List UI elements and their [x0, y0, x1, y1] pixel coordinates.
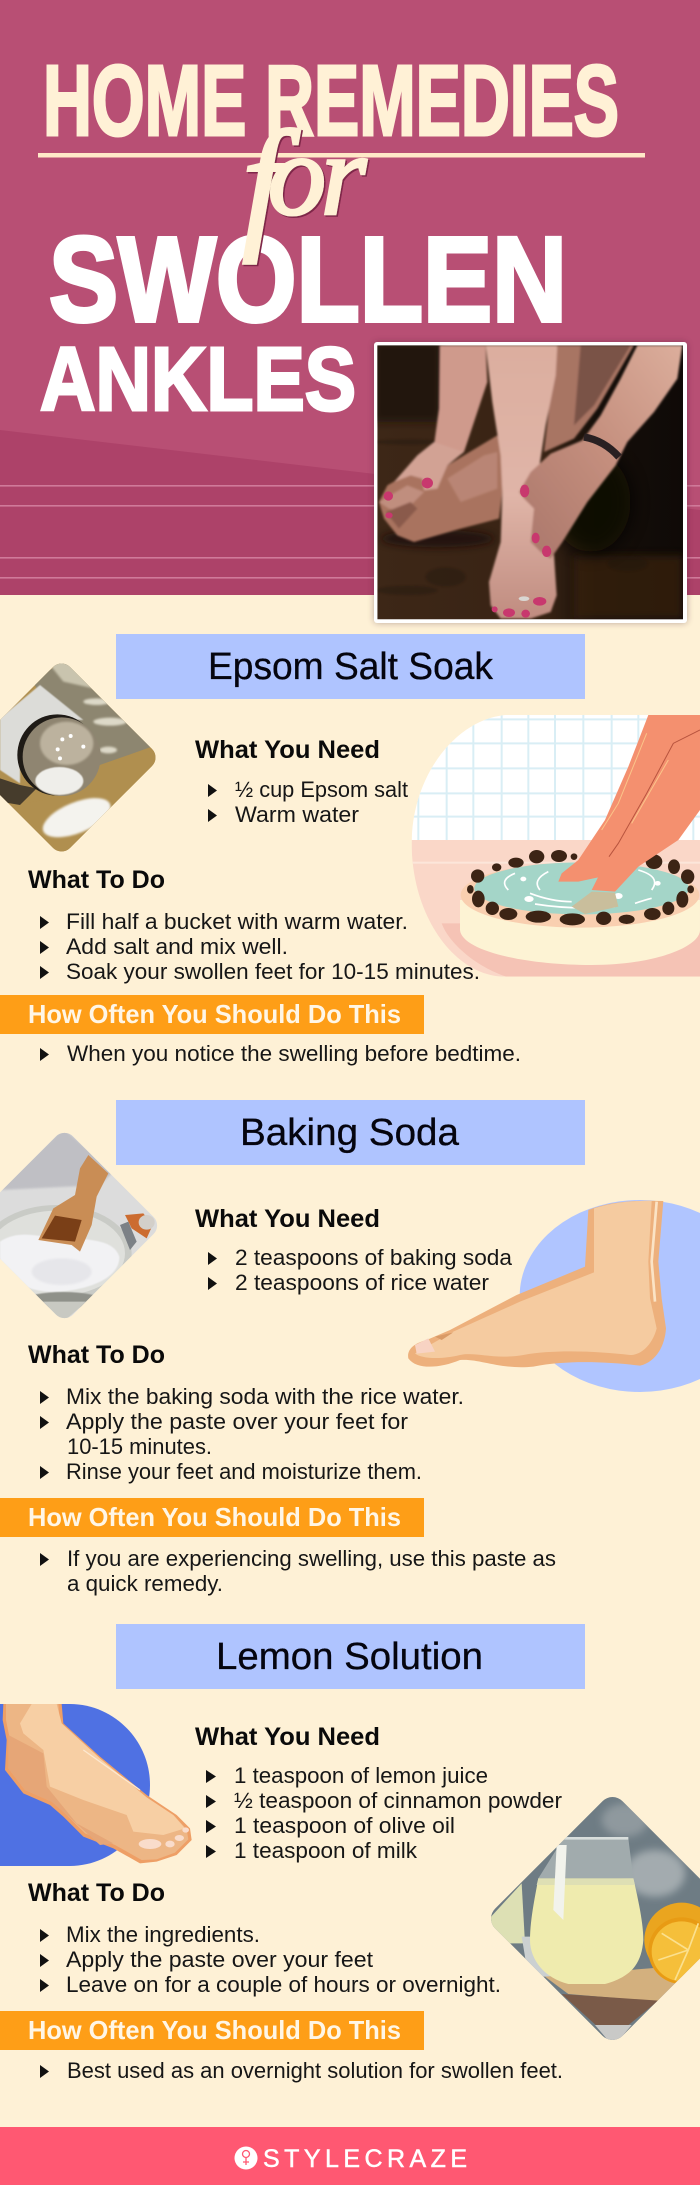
- ingredients: what you need: 2 teaspoons of baking soda: [235, 1245, 513, 1270]
- steps: what to do: 10-15 minutes.: [67, 1434, 212, 1459]
- ingredients: what you need: What You Need: [195, 1205, 380, 1233]
- title: [38, 45, 645, 430]
- ingredients: what you need: 1 teaspoon of lemon juice: [234, 1763, 488, 1788]
- frequency note: If you are experiencing swelling, use this paste as: [67, 1546, 556, 1571]
- section 3 panel: Lemon Solution: [0, 1624, 700, 2083]
- ingredients: what you need: [195, 1205, 513, 1295]
- steps: what to do: [28, 1879, 501, 1997]
- section heading: Lemon Solution: Lemon Solution: [216, 1636, 483, 1678]
- title: SWOLLEN: [49, 211, 567, 347]
- ingredients: what you need: [195, 736, 408, 827]
- steps: what to do: Apply the paste over your feet: [66, 1947, 373, 1972]
- ingredients: what you need: 2 teaspoons of rice water: [235, 1270, 489, 1295]
- ingredients: what you need: What You Need: [195, 1723, 380, 1751]
- frequency banner: How Often You Should Do This: [28, 2015, 401, 2045]
- photo: lemon drink diamond: [485, 1790, 700, 2047]
- ingredients: what you need: ½ cup Epsom salt: [235, 777, 408, 802]
- frequency banner: [0, 995, 424, 1034]
- steps: what to do: Apply the paste over your feet for: [66, 1409, 408, 1434]
- section heading: Baking Soda: Baking Soda: [240, 1112, 460, 1154]
- frequency banner: [0, 2011, 424, 2050]
- title: ANKLES: [40, 330, 356, 430]
- frequency banner: How Often You Should Do This: [28, 1502, 401, 1532]
- steps: what to do: [28, 866, 480, 984]
- steps: what to do: Soak your swollen feet for 10-15 minutes.: [66, 959, 480, 984]
- ingredients: what you need: 1 teaspoon of olive oil: [234, 1813, 455, 1838]
- title: f: [242, 101, 300, 264]
- frequency note: When you notice the swelling before bedtime.: [67, 1041, 521, 1066]
- frequency note: Best used as an overnight solution for swollen feet.: [67, 2058, 563, 2083]
- steps: what to do: Mix the ingredients.: [66, 1922, 260, 1947]
- steps: what to do: Rinse your feet and moisturize them.: [66, 1459, 422, 1484]
- icon: StyleCraze logo: [234, 2146, 258, 2170]
- steps: what to do: Fill half a bucket with warm water.: [66, 909, 408, 934]
- illustration: feet soaking in a basin: [405, 710, 700, 980]
- steps: what to do: What To Do: [28, 1879, 165, 1907]
- frequency note: [40, 1546, 556, 1596]
- photo: baking soda jar diamond: [0, 1132, 157, 1318]
- frequency note: a quick remedy.: [67, 1571, 223, 1596]
- footer brand bar: [0, 2127, 700, 2185]
- ingredients: what you need: 1 teaspoon of milk: [234, 1838, 418, 1863]
- header banner: [0, 0, 700, 595]
- steps: what to do: Mix the baking soda with the rice water.: [66, 1384, 464, 1409]
- steps: what to do: What To Do: [28, 866, 165, 894]
- frequency banner: [0, 1498, 424, 1537]
- section heading: Lemon Solution: [116, 1624, 585, 1689]
- section heading: Epsom Salt Soak: Epsom Salt Soak: [208, 646, 494, 688]
- title: or: [268, 112, 367, 240]
- steps: what to do: Add salt and mix well.: [66, 934, 288, 959]
- steps: what to do: Leave on for a couple of hours or overnight.: [66, 1972, 501, 1997]
- steps: what to do: What To Do: [28, 1341, 165, 1369]
- section 1 panel: Epsom Salt Soak: [0, 634, 700, 1066]
- ingredients: what you need: What You Need: [195, 736, 380, 764]
- ingredients: what you need: ½ teaspoon of cinnamon powder: [234, 1788, 562, 1813]
- ingredients: what you need: Warm water: [235, 802, 359, 827]
- frequency banner: How Often You Should Do This: [28, 999, 401, 1029]
- section heading: Baking Soda: [116, 1100, 585, 1165]
- section heading: Epsom Salt Soak: [116, 634, 585, 699]
- section 2 panel: Baking Soda: [0, 1100, 700, 1596]
- ingredients: what you need: [195, 1723, 562, 1863]
- illustration: foot on blue circle: [408, 1200, 700, 1392]
- photo: hands holding swollen ankles: [374, 342, 687, 623]
- illustration: foot on blue shape: [0, 1704, 192, 1866]
- footer brand bar: STYLECRAZE: [263, 2145, 467, 2173]
- steps: what to do: [28, 1341, 464, 1484]
- photo: salt shaker diamond: [0, 664, 156, 852]
